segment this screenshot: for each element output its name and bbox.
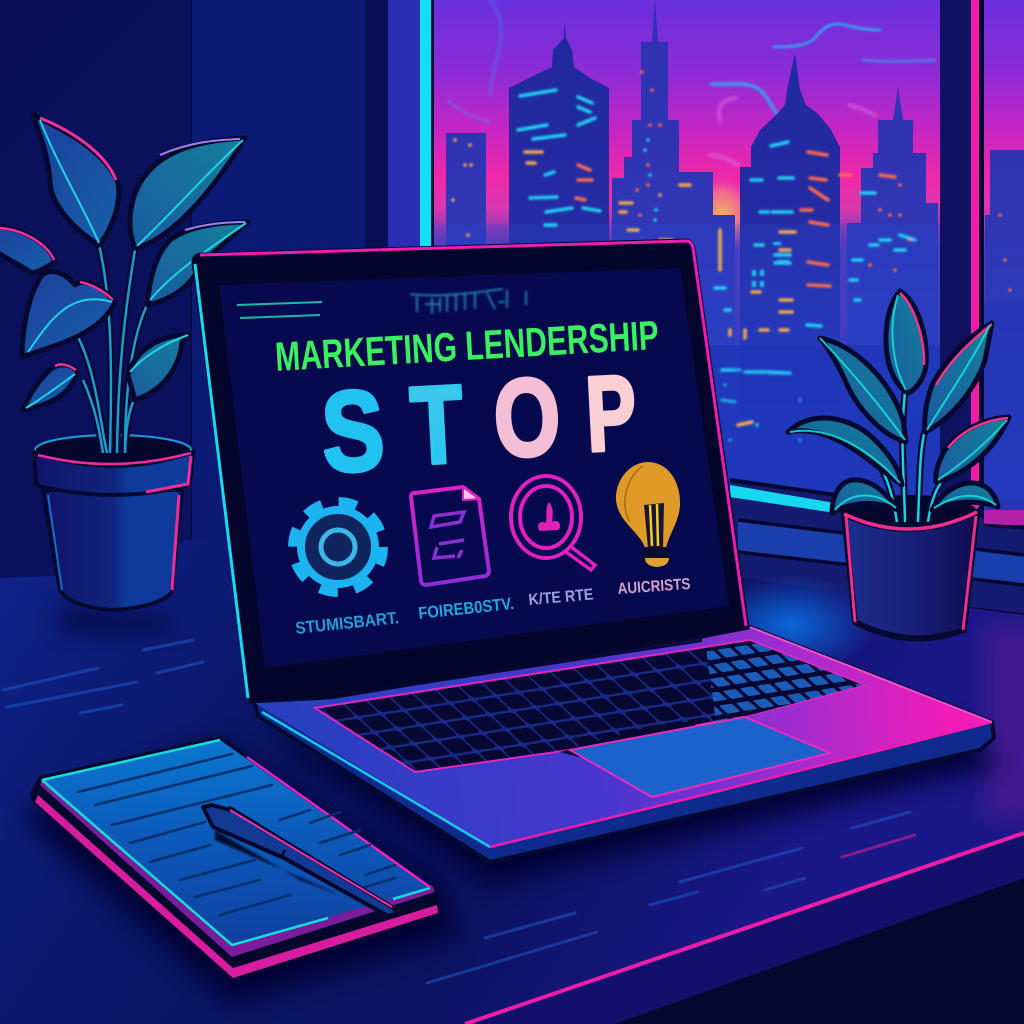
sky xyxy=(432,0,942,500)
right plant stems xyxy=(870,392,950,522)
desk shadows xyxy=(20,610,1000,1005)
headline: MARKETING LENDERSHIP xyxy=(274,312,660,380)
icon captions: AUICRISTS xyxy=(617,576,691,598)
STOP letters: T xyxy=(408,362,466,488)
menu lines xyxy=(237,302,322,318)
icon captions: K/TE RTE xyxy=(528,586,594,609)
right pot interior xyxy=(843,495,977,529)
icon: gear xyxy=(294,503,382,591)
icon: document xyxy=(411,487,489,585)
lower city haze xyxy=(432,225,942,500)
right pot xyxy=(844,512,977,638)
front buildings xyxy=(509,22,840,500)
laptop xyxy=(193,240,994,862)
icon: light bulb xyxy=(616,462,680,567)
right plant highlights xyxy=(790,293,1008,510)
window with city skyline xyxy=(420,0,1024,640)
header scribble xyxy=(410,289,526,314)
STOP letters: S xyxy=(319,367,387,497)
STOP letters: O xyxy=(491,355,563,481)
back buildings xyxy=(446,0,1024,500)
left pot interior xyxy=(35,435,191,465)
window sill xyxy=(730,480,1024,640)
magnifier glyph xyxy=(538,502,560,531)
right plant xyxy=(788,291,1009,638)
window lights xyxy=(453,72,1010,440)
screen contents xyxy=(237,289,691,638)
STOP letters xyxy=(319,354,639,497)
frame uprights xyxy=(420,0,431,248)
clouds xyxy=(448,0,935,165)
stems xyxy=(78,245,148,453)
right plant leaves xyxy=(788,291,1009,513)
left plant xyxy=(0,115,248,610)
notebook lines xyxy=(78,754,395,915)
keyboard xyxy=(315,640,865,772)
left pot xyxy=(34,452,193,610)
leaves xyxy=(0,115,248,410)
desk xyxy=(0,536,1024,1024)
notebook xyxy=(32,738,438,978)
pen xyxy=(203,805,398,916)
trackpad xyxy=(570,717,830,797)
STOP letters: P xyxy=(583,354,639,474)
icon: magnifier xyxy=(511,476,595,570)
laptop lid xyxy=(193,240,748,702)
icon captions xyxy=(294,576,691,638)
screen xyxy=(219,268,729,668)
laptop base xyxy=(255,627,994,862)
icon captions: STUMISBART. xyxy=(294,608,400,638)
icon captions: FOIREB0STV. xyxy=(417,594,515,623)
desk front edge xyxy=(480,833,1024,1024)
leaf highlights xyxy=(0,118,246,408)
